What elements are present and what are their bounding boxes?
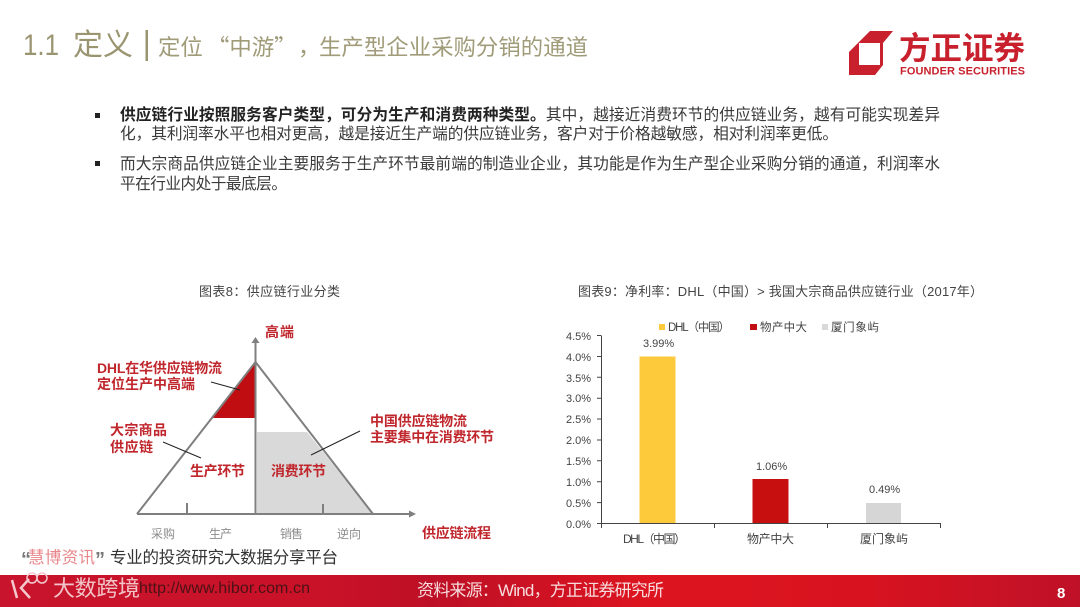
logo: Founder Securities: FOUNDER SECURITIES <box>900 66 1025 78</box>
y axis labels: 1.0% <box>566 477 591 489</box>
value labels <box>643 338 900 496</box>
y axis labels: 2.5% <box>566 414 591 426</box>
title: ， <box>298 30 320 62</box>
y axis labels: 0.5% <box>566 498 591 510</box>
bullet 2: 而大宗商品供应链企业主要服务于生产环节最前端的制造业企业，其功能是作为生产型企业采购分销的通道，利润率水 <box>120 154 940 173</box>
title: 定位 <box>158 30 203 62</box>
watermark slogan: 专业的投资研究大数据分享平台 <box>110 548 338 567</box>
bullet 2: 平在行业内处于最底层。 <box>120 175 287 193</box>
watermark slogan: ” <box>95 549 105 571</box>
logo: Founder Securities <box>849 30 1025 78</box>
consumption area grey <box>257 432 373 514</box>
y axis labels <box>566 331 591 531</box>
y axis labels: 1.5% <box>566 456 591 468</box>
bullet 1: 供应链行业按照服务客户类型，可分为生产和消费两种类型。其中，越接近消费环节的供应链业务，越有可能实现差异 <box>120 105 940 124</box>
legend: DHL（中国） <box>668 321 730 334</box>
watermark slogan: “ <box>21 549 31 571</box>
page number: 8 <box>1057 585 1065 602</box>
y axis labels: 2.0% <box>566 435 591 447</box>
red labels: 大宗商品 <box>110 422 167 438</box>
heading: figure 9: 图表9：净利率：DHL（中国）> 我国大宗商品供应链行业（2017年） <box>578 284 983 299</box>
y axis labels: 4.5% <box>566 331 591 343</box>
watermark brand <box>12 573 140 601</box>
category labels <box>623 531 908 546</box>
category labels: 厦门象屿 <box>860 531 908 546</box>
title: “中游” <box>207 30 297 62</box>
bar chart: net margin <box>566 320 940 546</box>
red labels: 供应链流程 <box>422 525 491 541</box>
red labels: 供应链 <box>110 439 153 455</box>
grey stage labels: 销售 <box>280 526 303 541</box>
brand icon <box>12 573 47 598</box>
text block: bullet points <box>95 105 940 193</box>
red labels: 高端 <box>265 324 294 340</box>
legend: 厦门象屿 <box>831 320 879 334</box>
triangle outline and axes <box>137 342 410 514</box>
grey stage labels: 逆向 <box>337 526 361 541</box>
watermark brand: 大数跨境 <box>53 576 140 601</box>
leader lines <box>163 382 360 458</box>
grey stage labels: 采购 <box>151 526 175 541</box>
high-end production area red <box>212 363 255 418</box>
red labels: 主要集中在消费环节 <box>370 429 494 445</box>
bullet 2 <box>95 154 940 193</box>
red labels: 中国供应链物流 <box>370 413 467 429</box>
legend: 物产中大 <box>760 320 808 334</box>
source note: 资料来源：Wind，方正证券研究所 <box>417 581 664 600</box>
y axis labels: 4.0% <box>566 352 591 364</box>
title: 定义 <box>73 20 133 64</box>
bullet 1 <box>95 105 940 143</box>
category labels: DHL（中国） <box>623 531 686 546</box>
grey stage labels: 生产 <box>209 527 232 541</box>
value labels: 3.99% <box>643 338 674 350</box>
red labels <box>97 324 494 541</box>
y axis labels: 0.0% <box>566 519 591 531</box>
logo: Founder Securities: 方正证券 <box>899 30 1025 66</box>
heading: figure 8: 图表8：供应链行业分类 <box>199 284 340 299</box>
red labels: 定位生产中高端 <box>97 376 195 392</box>
red labels: DHL在华供应链物流 <box>97 360 222 376</box>
watermark slogan: 慧博资讯 <box>28 548 95 567</box>
watermark url: http://www.hibor.com.cn <box>139 580 310 597</box>
bullet 1: 化，其利润率水平也相对更高，越是接近生产端的供应链业务，客户对于价格越敏感，相对利润率更低。 <box>120 124 838 143</box>
title <box>23 20 588 64</box>
value labels: 1.06% <box>756 461 787 473</box>
watermark slogan <box>21 548 338 571</box>
triangle diagram: supply chain classification <box>97 324 494 541</box>
red labels: 生产环节 <box>190 463 245 479</box>
category labels: 物产中大 <box>747 531 794 546</box>
title: 1.1 <box>23 29 59 62</box>
bars <box>640 356 676 524</box>
y axis labels: 3.5% <box>566 373 591 385</box>
title: 生产型企业采购分销的通道 <box>319 30 588 62</box>
footer bar <box>0 575 1080 607</box>
red labels: 消费环节 <box>271 463 326 479</box>
y axis labels: 3.0% <box>566 393 591 405</box>
axes <box>597 336 940 528</box>
grey stage labels <box>151 526 361 541</box>
legend <box>659 320 879 334</box>
value labels: 0.49% <box>869 484 900 496</box>
